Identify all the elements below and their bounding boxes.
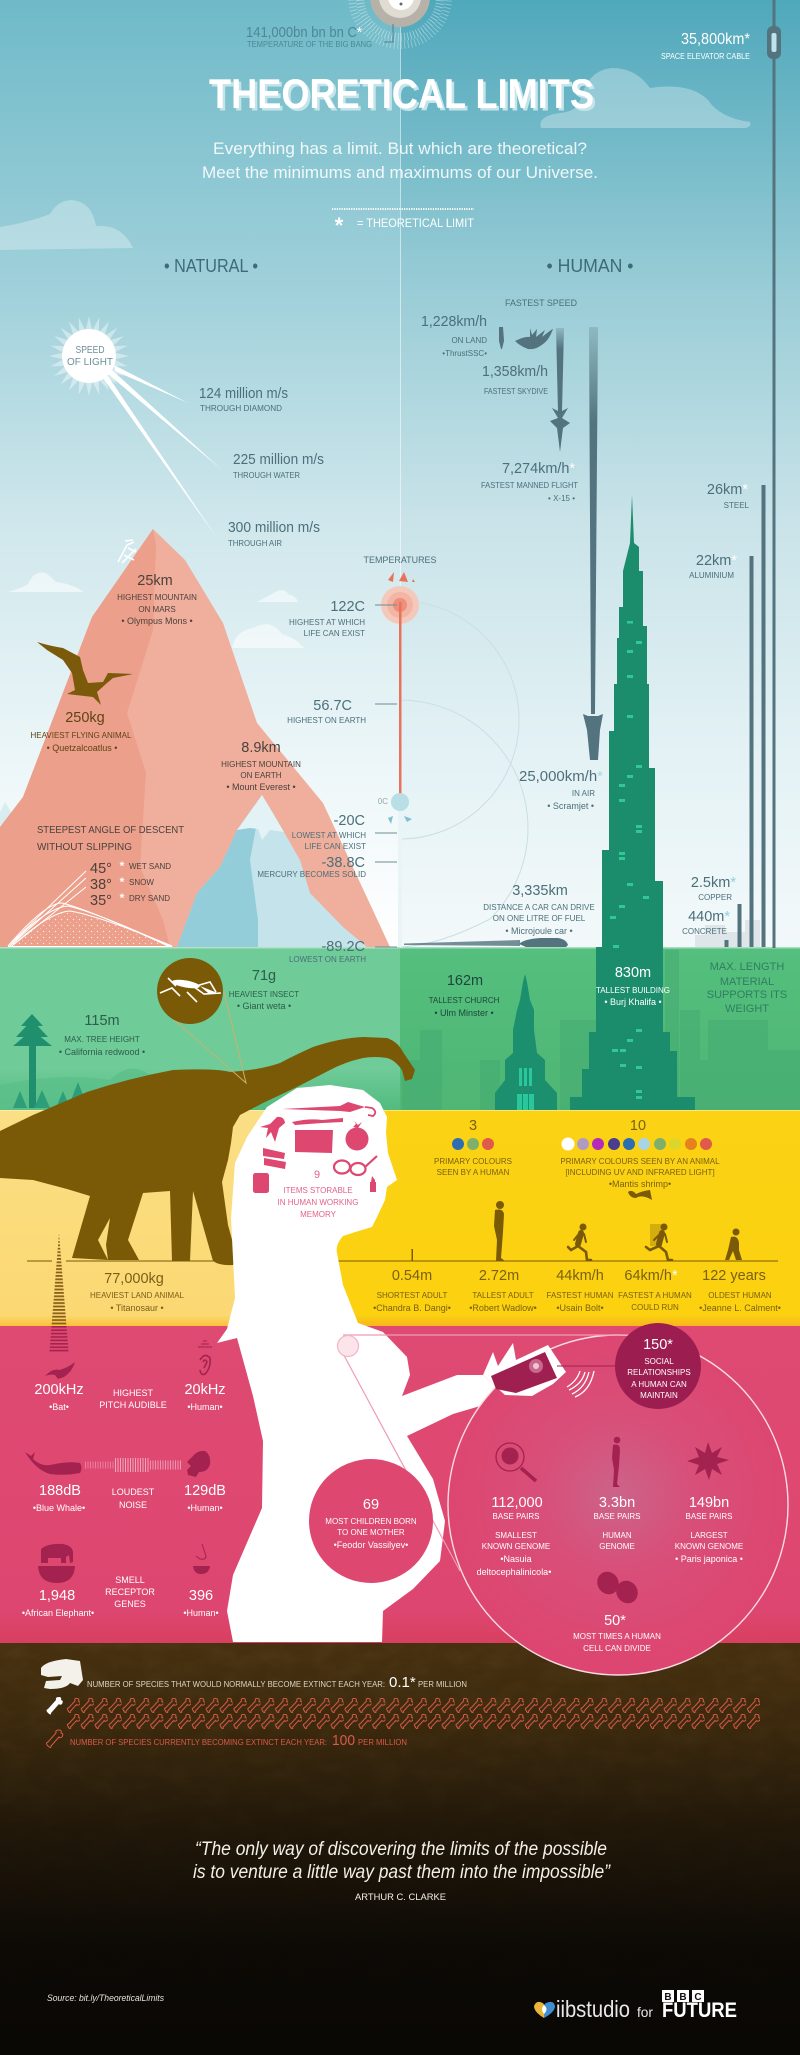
icon: scramjet trail and missile (583, 327, 603, 760)
label: material lengths (682, 482, 750, 936)
icon: california redwood (13, 1014, 88, 1108)
label: burj khalifa: 830m (615, 965, 651, 981)
label: temperature scale: 122C (330, 599, 365, 615)
label: cell divisions (573, 1613, 661, 1653)
label: steepest angle of descent: * (120, 875, 125, 889)
label: olympus mons: • Olympus Mons • (121, 616, 193, 626)
circle: most children: MOST CHILDREN BORN (325, 1517, 417, 1526)
label: material lengths: 2.5km* (691, 875, 736, 891)
label: largest genome: BASE PAIRS (686, 1512, 732, 1521)
label: speed of light values (199, 386, 324, 548)
label: largest genome: KNOWN GENOME (675, 1542, 743, 1551)
label: land and skydive speed: •ThrustSSC• (442, 349, 487, 358)
labels: human records: FASTEST A HUMAN (618, 1291, 692, 1300)
label: current extinction rate: NUMBER OF SPECIES CURRENTLY BECOMING EXTINCT EACH YEAR: (70, 1737, 327, 1747)
label: max length material: WEIGHT (725, 1003, 769, 1015)
label: max length material: SUPPORTS ITS (707, 989, 787, 1001)
callout line (338, 1335, 633, 1571)
label: temperature scale: HIGHEST ON EARTH (287, 716, 366, 725)
label: steepest angle of descent: STEEPEST ANGLE OF DESCENT (37, 824, 185, 836)
labels: human records: COULD RUN (631, 1303, 679, 1312)
label: heaviest flying animal: • Quetzalcoatlus • (47, 743, 117, 753)
icon: human nose (193, 1544, 210, 1574)
label: microjoule car: DISTANCE A CAR CAN DRIVE (483, 903, 595, 912)
icon: human figure (612, 1437, 620, 1487)
labels: human records: •Robert Wadlow• (469, 1303, 537, 1313)
small clouds (0, 572, 304, 830)
circle: social relationships: 150* (643, 1337, 673, 1353)
label: redwood: MAX. TREE HEIGHT (64, 1035, 140, 1044)
labels: loudness: LOUDEST (112, 1487, 155, 1497)
labels: human records: 64km/h* (624, 1268, 678, 1284)
icon: dinosaur skull (41, 1659, 83, 1689)
labels: human records: •Usain Bolt• (556, 1303, 604, 1313)
label: mount everest (221, 740, 301, 792)
label: titanosaur: 77,000kg (104, 1271, 164, 1287)
circle: social relationships (615, 1323, 701, 1409)
labels: human records: 2.72m (479, 1268, 519, 1284)
label: temperature scale: LOWEST ON EARTH (289, 955, 366, 964)
circle: social relationships: A HUMAN CAN (631, 1380, 687, 1389)
chart: extinction bones (46, 1697, 760, 1748)
label: heaviest flying animal: 250kg (65, 710, 105, 726)
labels: smell: SMELL (115, 1575, 145, 1585)
label: scramjet (519, 769, 603, 811)
faint skyline behind material bars (695, 920, 760, 947)
labels: smell (22, 1575, 219, 1618)
label: land and skydive speed: 1,228km/h (421, 314, 487, 330)
label: cell divisions: CELL CAN DIVIDE (583, 1644, 651, 1653)
label: temperature scale: LIFE CAN EXIST (305, 842, 366, 851)
label: ulm minster: TALLEST CHURCH (429, 996, 500, 1005)
chart: colours seen by mantis shrimp: PRIMARY COLOURS SEEN BY AN ANIMAL (560, 1157, 720, 1166)
title: THEORETICAL LIMITS (209, 70, 594, 117)
legend: theoretical limit: * (335, 213, 344, 238)
label: material lengths: CONCRETE (682, 927, 727, 936)
label: redwood: • California redwood • (59, 1047, 145, 1057)
label: fastest speed heading: FASTEST SPEED (505, 298, 577, 308)
labels: human records: FASTEST HUMAN (547, 1291, 614, 1300)
label: temperature scale: 56.7C (313, 698, 352, 714)
chart: colours seen by a human: SEEN BY A HUMAN (437, 1168, 510, 1177)
icon: blue whale (25, 1452, 82, 1475)
label: big bang temperature: TEMPERATURE OF THE BIG BANG (247, 40, 372, 49)
label: speed of light values: THROUGH AIR (228, 539, 282, 548)
label: speed of light values: 124 million m/s (199, 386, 288, 402)
label: olympus mons (117, 573, 197, 626)
icon: dividing cell (593, 1568, 642, 1607)
labels: human records: 44km/h (556, 1268, 604, 1284)
label: steepest angle of descent: WITHOUT SLIPPING (37, 841, 132, 853)
panel: yellow band (0, 1110, 800, 1326)
circle: most children: 69 (363, 1497, 379, 1513)
icon: skydiver (515, 328, 553, 349)
cloud: top right (540, 68, 750, 128)
logo: bbc future (662, 1990, 737, 2022)
label: ulm minster: 162m (447, 973, 483, 989)
logo: bbc future: B (664, 1992, 672, 2003)
panel: green band (0, 947, 800, 1110)
icon: bat (45, 1362, 75, 1379)
logo: iibstudio: for (637, 2004, 653, 2020)
label: items storable: 9 (314, 1169, 320, 1181)
label: human genome: 3.3bn (599, 1495, 635, 1511)
label: temperatures heading: TEMPERATURES (364, 555, 436, 566)
label: temperature scale: 0C (378, 797, 388, 806)
label: human genome (594, 1495, 640, 1551)
chart: colours seen by a human: 3 (469, 1118, 477, 1134)
label: speed of light values: THROUGH DIAMOND (200, 404, 282, 413)
label: normal extinction rate: PER MILLION (418, 1679, 467, 1689)
chart: colours seen by a human (434, 1118, 512, 1177)
background: sky (0, 0, 800, 948)
panel: pink band (0, 1326, 800, 1643)
label: temperature scale: HIGHEST AT WHICH (289, 618, 365, 627)
logo: bbc future: C (694, 1992, 702, 2003)
label: scramjet: 25,000km/h* (519, 769, 603, 785)
quote: “The only way of discovering the limits of the possible (195, 1838, 607, 1860)
label: temperature scale: LIFE CAN EXIST (304, 629, 365, 638)
label: steepest angle of descent: * (120, 891, 125, 905)
logo: bbc future: FUTURE (662, 1999, 737, 2022)
label: space elevator: 35,800km* (681, 31, 750, 48)
icons: items in working memory (253, 1102, 377, 1193)
label: material lengths: COPPER (698, 893, 732, 902)
label: smallest genome: •Nasuia (500, 1554, 532, 1564)
icon: space elevator cable (767, 0, 781, 948)
label: current extinction rate: PER MILLION (358, 1737, 407, 1747)
label: max length material: MAX. LENGTH (710, 961, 784, 973)
label: material lengths: STEEL (724, 501, 750, 510)
label: items storable: IN HUMAN WORKING (278, 1198, 358, 1207)
label: max length material (707, 961, 787, 1015)
labels: pitch: •Bat• (49, 1402, 69, 1412)
icon: speed of light sun: OF LIGHT (67, 356, 114, 368)
label: human genome: HUMAN (602, 1531, 632, 1540)
circle: social relationships: MAINTAIN (640, 1391, 678, 1400)
panel: genome circle (448, 1335, 788, 1675)
chart: colours seen by a human: PRIMARY COLOURS (434, 1157, 512, 1166)
label: burj khalifa: TALLEST BUILDING (596, 986, 670, 995)
label: land and skydive speed: FASTEST MANNED FLIGHT (481, 481, 578, 490)
label: olympus mons: HIGHEST MOUNTAIN (117, 593, 197, 602)
label: scramjet: • Scramjet • (547, 801, 594, 811)
labels: loudness: 188dB (39, 1483, 81, 1499)
label: temperature scale: -38.8C (321, 855, 365, 871)
label: smallest genome: 112,000 (491, 1495, 543, 1511)
labels: pitch: PITCH AUDIBLE (99, 1400, 167, 1410)
label: speed of light values: 225 million m/s (233, 452, 324, 468)
heading: human: • HUMAN • (546, 256, 634, 276)
icon: theoretical fastest runner (646, 1224, 672, 1260)
label: steepest angle of descent: 35° (90, 893, 112, 909)
chart: highest pitch stripes (50, 1233, 68, 1352)
label: largest genome: • Paris japonica • (675, 1554, 743, 1564)
mountain: olympus mons (0, 529, 390, 947)
label: items storable: MEMORY (300, 1210, 337, 1219)
label: microjoule car (483, 883, 595, 936)
icon: big bang (352, 0, 448, 45)
labels: pitch (34, 1382, 226, 1412)
circle: social relationships: SOCIAL (644, 1357, 674, 1366)
subtitle: Everything has a limit. But which are theoretical? (213, 139, 587, 158)
labels: smell: 396 (189, 1588, 213, 1604)
label: smallest genome: KNOWN GENOME (482, 1542, 550, 1551)
icon: skydive trail and x-15 (550, 328, 570, 452)
title: THEORETICAL LIMITS (212, 72, 596, 120)
ground line (27, 1260, 778, 1262)
subtitle (202, 139, 598, 182)
label: steepest angle of descent: 45° (90, 861, 112, 877)
label: temperature scale (257, 599, 397, 964)
labels: pitch: HIGHEST (113, 1388, 153, 1398)
chart: colours seen by mantis shrimp (560, 1118, 720, 1200)
labels: loudness: 129dB (184, 1483, 226, 1499)
labels: pitch: •Human• (187, 1402, 223, 1412)
icon: hand and phone (483, 1343, 620, 1397)
icon: magnifier (496, 1443, 536, 1481)
label: burj khalifa (596, 965, 670, 1007)
mountain: everest (177, 795, 367, 947)
label: microjoule car: • Microjoule car • (505, 926, 573, 936)
label: big bang temperature: 141,000bn bn bn C* (246, 24, 362, 41)
labels: human records: TALLEST ADULT (472, 1291, 534, 1300)
label: cell divisions: MOST TIMES A HUMAN (573, 1632, 661, 1641)
labels: loudness: •Blue Whale• (33, 1503, 85, 1513)
labels: human records (373, 1268, 781, 1313)
chart: loudness sound waves (85, 1462, 182, 1468)
icon: shouting human head (187, 1451, 210, 1477)
label: smallest genome: SMALLEST (495, 1531, 537, 1540)
label: redwood: 115m (84, 1013, 120, 1029)
labels: human records: •Chandra B. Dangi• (373, 1303, 451, 1313)
heading: natural: • NATURAL • (164, 256, 258, 276)
icon: woman silhouette (217, 1085, 530, 1642)
label: microjoule car: 3,335km (512, 883, 568, 899)
label: giant weta: • Giant weta • (237, 1001, 291, 1011)
label: ulm minster: • Ulm Minster • (434, 1008, 494, 1018)
label: titanosaur (90, 1271, 185, 1313)
icon: quetzalcoatlus (37, 642, 133, 705)
legend: theoretical limit: = THEORETICAL LIMIT (357, 216, 475, 230)
label: current extinction rate: 100 (332, 1732, 355, 1749)
label: titanosaur: HEAVIEST LAND ANIMAL (90, 1291, 185, 1300)
icon: star anise (687, 1442, 729, 1480)
label: burj khalifa: • Burj Khalifa • (604, 997, 662, 1007)
labels: smell: GENES (114, 1599, 146, 1609)
label: steepest angle of descent: * (120, 859, 125, 873)
label: speed of light values: 300 million m/s (228, 520, 320, 536)
icon: shortest adult (412, 1249, 413, 1261)
label: human genome: BASE PAIRS (594, 1512, 640, 1521)
label: material lengths: ALUMINIUM (689, 571, 734, 580)
label: steepest angle of descent: DRY SAND (129, 894, 170, 903)
chart: colours seen by mantis shrimp: [INCLUDING UV AND INFRARED LIGHT] (565, 1168, 715, 1177)
labels: loudness: NOISE (119, 1500, 147, 1510)
label: normal extinction rate: NUMBER OF SPECIES THAT WOULD NORMALLY BECOME EXTINCT EACH YEAR: (87, 1679, 385, 1689)
icon: oldest human (725, 1228, 742, 1260)
label: steepest angle of descent (37, 824, 185, 909)
centre divider (400, 0, 402, 948)
labels: smell: •African Elephant• (22, 1608, 94, 1618)
label: mount everest: HIGHEST MOUNTAIN (221, 760, 301, 769)
icon: thrustssc (499, 327, 504, 349)
labels: human records: •Jeanne L. Calment• (699, 1303, 781, 1313)
chart: sand angle curves (8, 871, 172, 946)
label: largest genome: 149bn (689, 1495, 729, 1511)
quote (193, 1838, 611, 1903)
icon: rover on mars (118, 540, 136, 563)
labels: human records: 0.54m (392, 1268, 432, 1284)
label: material lengths: 440m* (688, 909, 730, 925)
icon: human ear (198, 1341, 212, 1374)
label: material lengths: 26km* (707, 482, 748, 498)
label: titanosaur: • Titanosaur • (110, 1303, 164, 1313)
label: smallest genome (477, 1495, 551, 1577)
legend: theoretical limit (332, 209, 475, 238)
label: land and skydive speed: 1,358km/h (482, 364, 548, 380)
label: heaviest flying animal: HEAVIEST FLYING ANIMAL (31, 731, 132, 740)
labels: loudness (33, 1483, 226, 1513)
label: olympus mons: ON MARS (138, 605, 176, 614)
label: normal extinction rate: 0.1* (389, 1674, 416, 1691)
labels: smell: 1,948 (39, 1588, 75, 1604)
circle: most children (309, 1459, 433, 1583)
label: max length material: MATERIAL (720, 976, 774, 988)
label: cell divisions: 50* (604, 1613, 626, 1629)
labels: smell: RECEPTOR (105, 1587, 155, 1597)
label: space elevator: SPACE ELEVATOR CABLE (661, 52, 750, 61)
label: big bang temperature (246, 24, 372, 49)
label: giant weta (229, 968, 299, 1011)
callout: giant weta (157, 958, 246, 1083)
label: mount everest: ON EARTH (240, 771, 282, 780)
label: steepest angle of descent: WET SAND (129, 862, 171, 871)
icon: african elephant (38, 1544, 75, 1583)
circle: most children: TO ONE MOTHER (337, 1528, 405, 1537)
label: largest genome: LARGEST (690, 1531, 728, 1540)
labels: pitch: 200kHz (34, 1382, 84, 1398)
label: space elevator (661, 31, 750, 61)
quote: ARTHUR C. CLARKE (355, 1892, 446, 1903)
logo: bbc future: B (679, 1992, 687, 2003)
label: items storable: ITEMS STORABLE (283, 1186, 353, 1195)
labels: pitch: 20kHz (184, 1382, 226, 1398)
source: Source: bit.ly/TheoreticalLimits (47, 1993, 164, 2004)
chart: material length bars (724, 485, 766, 947)
labels: human records: 122 years (702, 1268, 766, 1284)
label: land and skydive speed: FASTEST SKYDIVE (484, 387, 548, 396)
quote: is to venture a little way past them into the impossible” (193, 1861, 611, 1883)
label: land and skydive speed: 7,274km/h* (502, 461, 575, 477)
subtitle: Meet the minimums and maximums of our Universe. (202, 163, 598, 182)
label: temperature scale: MERCURY BECOMES SOLID (257, 870, 366, 879)
icon: speed of light sun (49, 316, 222, 538)
labels: loudness: •Human• (187, 1503, 223, 1513)
icon: burj khalifa (570, 495, 695, 1110)
label: mount everest: • Mount Everest • (226, 782, 296, 792)
label: largest genome (675, 1495, 743, 1564)
label: land and skydive speed: ON LAND (451, 336, 487, 345)
label: smallest genome: deltocephalinicola• (477, 1567, 551, 1577)
icon: titanosaur (0, 1037, 415, 1265)
label: speed of light values: THROUGH WATER (233, 471, 300, 480)
chart: colours seen by mantis shrimp: 10 (630, 1118, 646, 1134)
icon: microjoule car (404, 938, 568, 947)
label: microjoule car: ON ONE LITRE OF FUEL (493, 914, 586, 923)
label: mount everest: 8.9km (241, 740, 281, 756)
label: current extinction rate (70, 1732, 407, 1749)
icon: speed of light sun: SPEED (76, 344, 105, 356)
label: temperature scale: -89.2C (321, 939, 365, 955)
label: heaviest flying animal (31, 710, 132, 753)
labels: human records: SHORTEST ADULT (377, 1291, 447, 1300)
label: steepest angle of descent: 38° (90, 877, 112, 893)
circle: social relationships: RELATIONSHIPS (627, 1368, 691, 1377)
panel: brown band (0, 1643, 800, 2055)
labels: human records: OLDEST HUMAN (708, 1291, 772, 1300)
label: normal extinction rate (87, 1674, 467, 1691)
label: items storable (278, 1169, 358, 1219)
label: human genome: GENOME (599, 1542, 635, 1551)
label: land and skydive speed: • X-15 • (548, 494, 575, 503)
label: steepest angle of descent: SNOW (129, 878, 154, 887)
icon: tallest adult (494, 1201, 505, 1261)
label: giant weta: HEAVIEST INSECT (229, 990, 299, 999)
label: olympus mons: 25km (137, 573, 173, 589)
label: giant weta: 71g (252, 968, 276, 984)
circle: most children: •Feodor Vassilyev• (334, 1540, 408, 1550)
labels: smell: •Human• (183, 1608, 219, 1618)
icon: fastest human running (568, 1224, 591, 1260)
chart: temperatures thermometer (381, 572, 528, 947)
label: ulm minster (429, 973, 500, 1018)
label: temperature scale: LOWEST AT WHICH (292, 831, 366, 840)
label: redwood (59, 1013, 145, 1057)
chart: colours seen by mantis shrimp: •Mantis shrimp• (609, 1179, 671, 1189)
label: material lengths: 22km* (696, 553, 737, 569)
label: scramjet: IN AIR (572, 789, 595, 798)
cloud: top left (0, 200, 133, 250)
label: temperature scale: -20C (334, 813, 365, 829)
label: land and skydive speed (421, 314, 578, 503)
icon: ulm minster (495, 974, 557, 1110)
label: smallest genome: BASE PAIRS (493, 1512, 539, 1521)
logo: iibstudio: iibstudio (556, 1996, 630, 2022)
